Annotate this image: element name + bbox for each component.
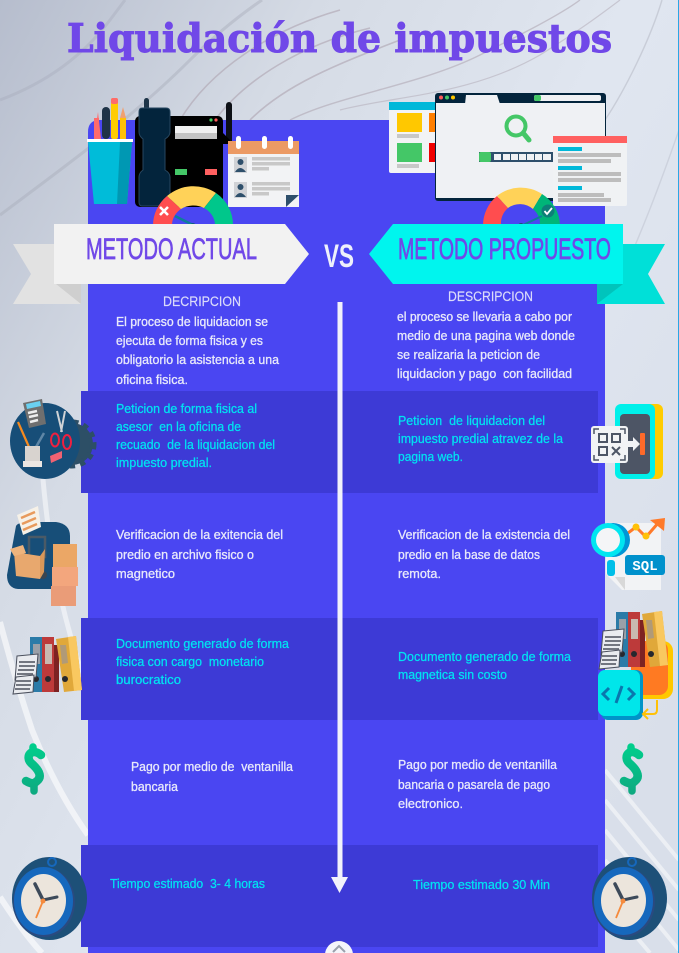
text: row 3 left: Documento generado de forma (116, 636, 290, 651)
text: row 3 left: fisica con cargo monetario (116, 654, 264, 669)
icon: moving boxes (7, 506, 78, 606)
text: row 1 right: Peticion de liquidacion del (398, 413, 545, 428)
icon: sql search (591, 518, 665, 590)
band: row 1 (81, 391, 598, 493)
icon: phone qr (591, 404, 663, 479)
banner: metodo propuesto (369, 224, 665, 304)
text: row 1 left: Peticion de forma fisica al (116, 401, 257, 416)
text: right description: liquidacion y pago con facilidad (397, 366, 572, 381)
icon: left gauge (153, 186, 233, 229)
text: left description: ejecuta de forma fisica y es (116, 333, 263, 348)
icon: browser search (389, 93, 606, 201)
text: time left: Tiempo estimado 3- 4 horas (110, 876, 265, 891)
text: row 2 left: predio en archivo fisico o (116, 547, 254, 562)
text: left description (116, 294, 280, 387)
text: row 3 right: magnetica sin costo (398, 667, 507, 682)
text: right description: DESCRIPCION (448, 289, 533, 304)
title: Liquidación de impuestos (67, 16, 612, 62)
text: time right: Tiempo estimado 30 Min (413, 877, 550, 892)
text: row 1 left (116, 401, 275, 470)
text: row 3 right (398, 649, 572, 682)
arrow: center timeline (331, 302, 348, 893)
text: left description: El proceso de liquidacion se (116, 314, 268, 329)
band: row 3 (81, 618, 598, 720)
label: vs: VS (324, 238, 354, 274)
text: row 4 right: bancaria o pasarela de pago (398, 777, 550, 792)
text: row 2 right (398, 527, 570, 581)
text: row 4 right: electronico. (398, 796, 463, 811)
icon: right gauge (483, 188, 560, 229)
text: row 1 left: asesor en la oficina de (116, 419, 241, 434)
text: row 1 left: recuado de la liquidacion del (116, 437, 275, 452)
text: row 2 left: Verificacion de la exitencia del (116, 527, 283, 542)
banner: metodo actual: METODO ACTUAL (86, 233, 257, 266)
icon: code and binders (598, 611, 673, 720)
icon: dollar left (26, 747, 41, 791)
text: row 4 right: Pago por medio de ventanilla (398, 757, 558, 772)
text: left description: DECRIPCION (163, 294, 241, 309)
text: right description: el proceso se llevaria a cabo por (397, 309, 573, 324)
text: left description: obligatorio la asistencia a una (116, 352, 280, 367)
band: row 5 (81, 845, 598, 947)
icon: clock right (592, 857, 667, 940)
text: row 2 left (116, 527, 283, 581)
icon: pen cup (87, 98, 133, 204)
icon: back to top button (325, 941, 353, 953)
icon: calendar contacts (228, 136, 299, 207)
text: right description: se realizaria la peticion de (397, 347, 540, 362)
text: row 1 left: impuesto predial. (116, 455, 212, 470)
text: row 1 right (398, 413, 564, 464)
text: right description (397, 289, 575, 381)
icon: document card (553, 136, 627, 206)
icon: sql search: SQL (632, 559, 658, 575)
icon: dollar right (624, 747, 639, 791)
icon: clock left (12, 857, 87, 940)
text: row 3 left (116, 636, 290, 687)
icon: gear disc tools (10, 399, 93, 479)
text: row 4 left (131, 759, 294, 794)
text: row 1 right: pagina web. (398, 449, 463, 464)
panel: main comparison background (88, 120, 605, 953)
text: row 3 right: Documento generado de forma (398, 649, 572, 664)
text: right description: medio de una pagina web donde (397, 328, 575, 343)
text: row 2 left: magnetico (116, 566, 175, 581)
text: left description: oficina fisica. (116, 372, 188, 387)
text: row 3 left: burocratico (116, 672, 181, 687)
text: row 2 right: predio en la base de datos (398, 547, 540, 562)
icon: binders left (13, 636, 82, 694)
text: row 4 left: Pago por medio de ventanilla (131, 759, 294, 774)
text: row 1 right: impuesto predial atravez de la (398, 431, 564, 446)
icon: telephone (135, 98, 232, 207)
text: row 2 right: remota. (398, 566, 441, 581)
text: row 2 right: Verificacion de la existencia del (398, 527, 570, 542)
text: row 4 right (398, 757, 558, 811)
text: row 4 left: bancaria (131, 779, 179, 794)
banner: metodo actual (13, 224, 309, 304)
